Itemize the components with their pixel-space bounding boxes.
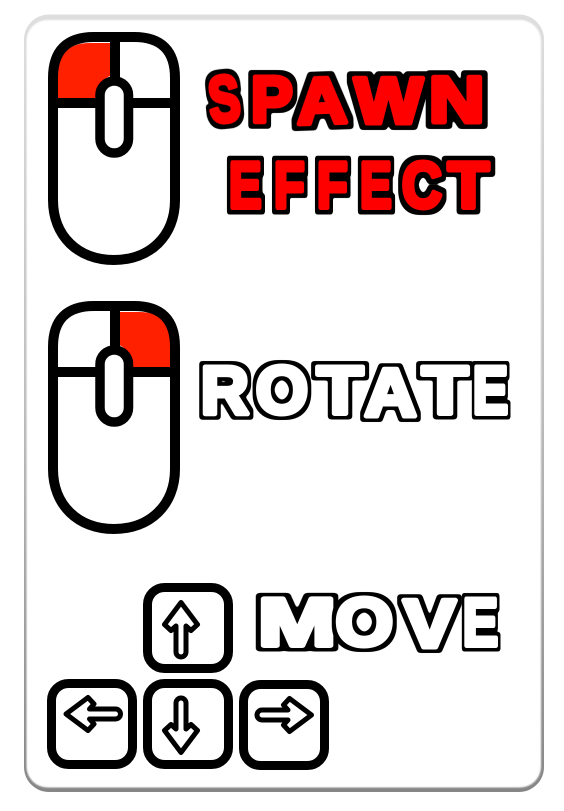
heading: move <box>258 584 498 662</box>
heading: spawn effect: T <box>448 148 489 221</box>
heading: spawn effect: N <box>429 64 484 137</box>
heading: rotate: T <box>422 353 468 429</box>
heading: rotate: E <box>473 352 508 428</box>
heading: spawn effect <box>205 63 489 222</box>
heading: rotate: A <box>364 355 417 431</box>
heading: move: V <box>404 586 456 662</box>
icon: mouse with right button highlighted <box>53 306 175 529</box>
heading: spawn effect: P <box>251 63 293 136</box>
heading: move: E <box>463 584 498 660</box>
heading: move: O <box>336 585 393 661</box>
heading: spawn effect: C <box>402 148 442 222</box>
heading: spawn effect: F <box>317 149 348 222</box>
heading: rotate: R <box>201 353 249 429</box>
icon: mouse with left button highlighted <box>53 37 175 260</box>
icon: up arrow key <box>148 588 228 668</box>
heading: move: M <box>258 585 336 660</box>
heading: rotate: O <box>256 353 308 429</box>
heading: spawn effect: F <box>274 149 305 222</box>
heading: spawn effect: E <box>229 150 262 222</box>
heading: rotate <box>201 352 508 431</box>
heading: rotate: T <box>317 353 363 429</box>
heading: spawn effect: E <box>360 149 392 222</box>
icon: left arrow key <box>52 684 132 764</box>
icon: down arrow key <box>148 684 228 764</box>
heading: spawn effect: A <box>295 64 348 138</box>
heading: spawn effect: W <box>354 64 423 137</box>
icon: right arrow key <box>244 684 324 766</box>
heading: spawn effect: S <box>205 63 244 138</box>
